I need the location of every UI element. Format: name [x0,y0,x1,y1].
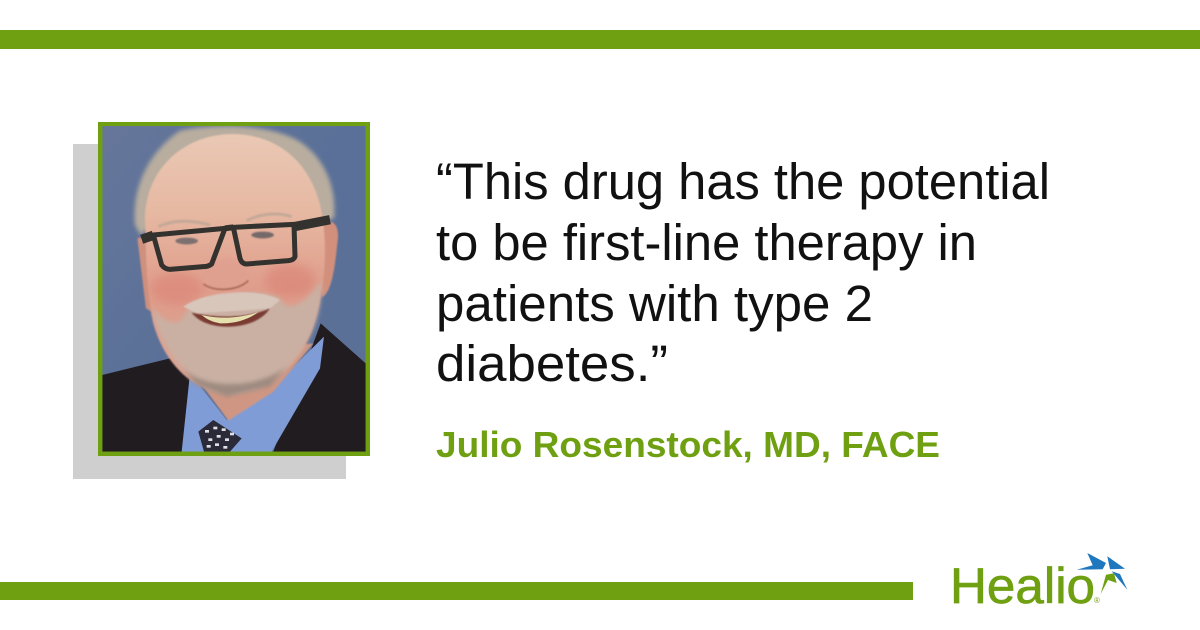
smile [192,308,270,327]
quote text [436,153,1050,392]
gray offset panel behind portrait [73,144,346,479]
hair [135,126,334,235]
bottom green bar [0,582,913,600]
tie pattern [205,427,234,449]
icon: star [1077,553,1127,594]
moustache highlight [183,292,280,313]
neck [193,343,313,421]
left ear [137,235,152,312]
portrait photo frame [98,122,370,456]
chin shadow [180,367,287,397]
right ear [318,221,338,297]
cheeks [152,272,202,305]
nose [202,258,250,292]
tie [198,420,242,452]
quote text: diabetes.” [436,335,668,392]
quote text: “This drug has the potential [436,153,1050,210]
beard [152,280,322,393]
attribution: Julio Rosenstock, MD, FACE [436,424,940,465]
shirt collar [182,337,324,452]
quote text: to be first-line therapy in [436,214,977,271]
glasses [142,220,330,269]
Healio logo: ® [1094,596,1100,605]
face [145,134,325,394]
eyes [175,238,198,244]
teeth [202,312,258,323]
suit [102,323,366,452]
eyebrows [158,214,292,227]
top green bar [0,30,1200,49]
Healio logo: Healio [950,558,1095,614]
quote text: patients with type 2 [436,275,873,332]
